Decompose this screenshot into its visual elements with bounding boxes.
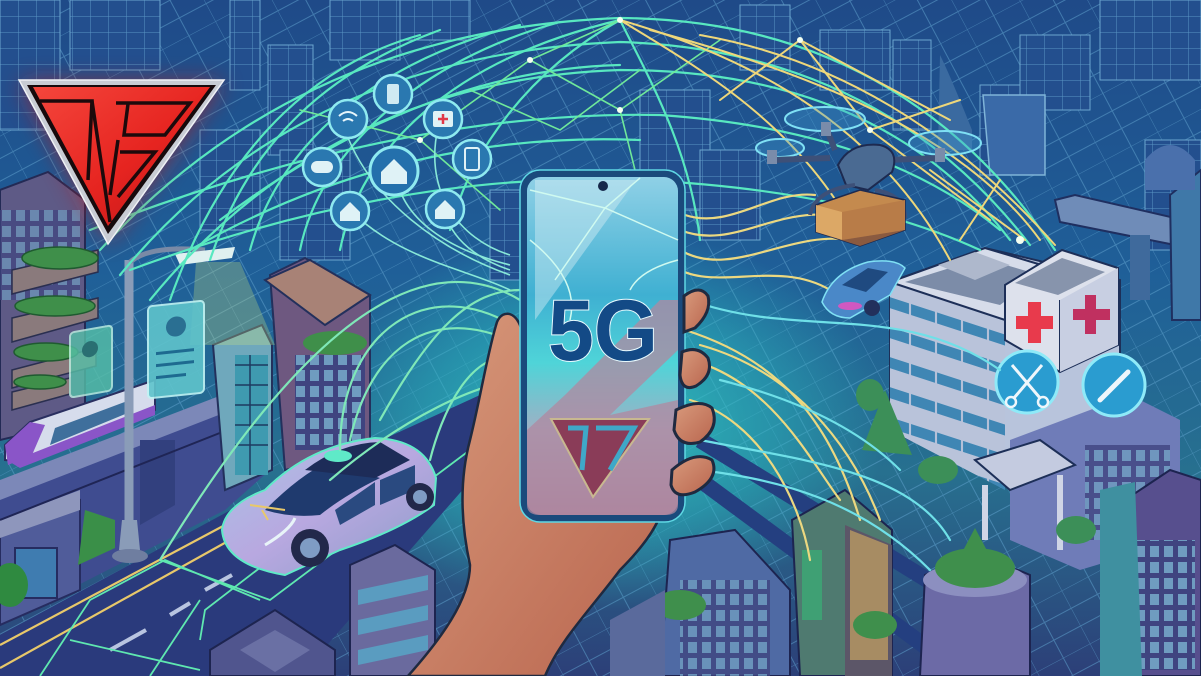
phone [520,170,685,522]
right towers [1100,470,1201,676]
icon: phone [374,75,412,113]
bushes near hospital [856,379,1096,544]
camera [598,181,608,191]
5G text: 5G [548,283,658,379]
tree tower [920,528,1030,676]
green tower [792,490,897,676]
far tower [938,55,1045,175]
small logo on screen [551,419,649,497]
holo panels [70,301,204,398]
streets [0,395,960,676]
dome network [90,17,1055,300]
icon: home small [331,192,369,230]
building: green balconies tower [0,172,98,440]
elevated train [5,380,155,468]
icon: scalpel [1083,354,1145,416]
icon cluster [303,75,510,290]
viaduct and building [0,390,270,625]
network lines from phone [160,195,1000,570]
car [222,438,436,575]
screen glare [535,180,636,320]
hospital [890,248,1120,510]
building: brown tower [265,258,370,470]
icon: medical [424,100,462,138]
left buildings [0,172,370,625]
icon: gamepad [303,148,341,186]
icon: scissors [996,351,1058,413]
logo [19,80,224,244]
icon: smart home [426,190,464,228]
right buildings [610,55,1201,676]
hand back [408,314,663,676]
small blue car [822,261,905,318]
icon: smartphone [453,140,491,178]
street lamp [112,247,275,563]
hospital sign [1005,250,1118,372]
lower wing [975,395,1180,570]
icon: home large [370,147,418,195]
skyscrapers bottom centre [610,530,790,676]
far right viaduct [1055,145,1201,320]
drone [756,107,981,246]
palm seen through screen [527,300,678,515]
distant skyline [0,0,1201,280]
screen network lines [530,178,678,320]
building: office [213,325,272,490]
icon: wifi [329,100,367,138]
bottom left buildings [210,545,435,676]
fingers [671,290,714,495]
